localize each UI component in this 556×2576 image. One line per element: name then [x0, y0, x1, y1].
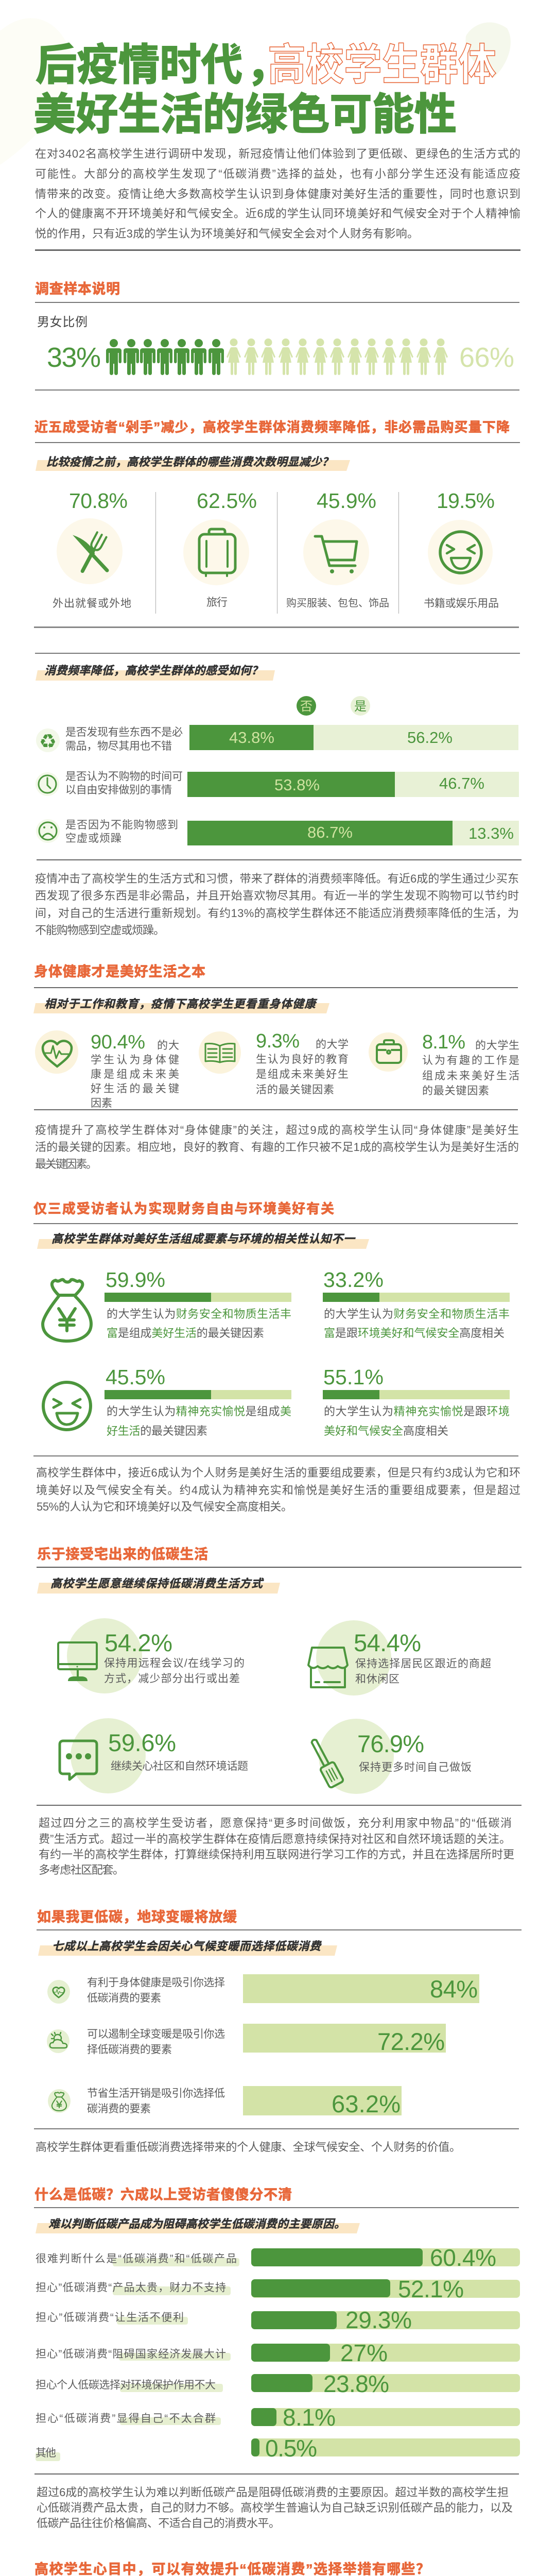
barrier row: economy: 担心”低碳消费“阻碍国家经济发展大计: [36, 2348, 226, 2360]
category: dining: 外出就餐或外地: [53, 598, 131, 609]
title: [33, 41, 496, 139]
paragraph: low-carbon life: 有约一半的高校学生群体，打算继续保持利用互联网进行学习工作的方式，并且在选择居所时更: [39, 1848, 514, 1861]
paragraph: low-carbon life: 超过四分之三的高校学生受访者，愿意保持“更多时间做饭，充分利用家中物品”的“低碳消: [39, 1817, 512, 1829]
stat: health: 的大: [157, 1040, 179, 1052]
title: ，: [246, 41, 289, 89]
factor: health 84%: 低碳消费的要素: [87, 1992, 161, 2004]
feeling row: time: 是否认为不购物的时间可: [65, 771, 183, 783]
factor: health 84%: [47, 1974, 479, 2004]
barrier row: inconvenient: 29.3%: [345, 2307, 412, 2333]
feeling row: necessities: [36, 725, 518, 753]
feeling row: emptiness: 是否因为不能购物感到: [65, 819, 178, 831]
paragraph: barriers: 超过6成的高校学生认为难以判断低碳产品是阻碍低碳消费的主要原因。超过半数的高校学生担: [37, 2486, 509, 2499]
factor: warming 72.2%: 择低碳消费的要素: [87, 2044, 172, 2056]
heading: climate: 如果我更低碳，地球变暖将放缓: [37, 1909, 237, 1925]
feeling row: emptiness: [36, 819, 519, 845]
title: 高校学生群体: [268, 41, 496, 89]
heading: low-carbon life: 乐于接受宅出来的低碳生活: [37, 1546, 208, 1562]
male icons: [106, 339, 224, 375]
stat: finance is key: 的大学生认为财务安全和物质生活丰: [107, 1308, 291, 1320]
female percent: 66%: [459, 342, 514, 373]
spending categories panel: [53, 489, 499, 614]
stat: community topics: [60, 1718, 248, 1793]
paragraph: consumption: 疫情冲击了高校学生的生活方式和习惯，带来了群体的消费频率降低。有近6成的学生通过少买东: [35, 872, 519, 885]
category: travel: [183, 489, 257, 608]
stat: health: 因素: [91, 1097, 112, 1109]
male percent: 33%: [47, 342, 101, 373]
paragraph: health: 疫情提升了高校学生群体对“身体健康”的关注，超过9成的高校学生认同“身体健康”是美好生: [35, 1124, 519, 1137]
stat: local shops: 54.4%: [354, 1629, 421, 1656]
stat: health: [35, 1030, 179, 1109]
legend: 否: [300, 700, 312, 714]
paragraph: consumption: [35, 872, 519, 937]
stat: work: 的大学生: [475, 1040, 519, 1052]
barrier row: other: 0.5%: [265, 2435, 317, 2462]
factor: savings 63.2%: [48, 2086, 402, 2117]
paragraph: health: 活的最关键的因素。相应地，良好的教育、有趣的工作只被不足1成的高校学生认为是美好生活的: [35, 1141, 519, 1154]
paragraph: consumption: 不能购物感到空虚或烦躁。: [35, 924, 165, 937]
factor: savings 63.2%: 63.2%: [332, 2090, 401, 2117]
stat: health: 康是组成未来美: [91, 1069, 179, 1080]
category: shopping: 购买服装、包包、饰品: [286, 597, 389, 609]
stat: finance and environment: 富是跟环境美好和气候安全高度相关: [324, 1327, 505, 1340]
stat: local shops: 和休闲区: [355, 1673, 399, 1685]
intro paragraph: 在对3402名高校学生进行调研中发现，新冠疫情让他们体验到了更低碳、更绿色的生活方式的: [35, 147, 520, 160]
stat: health: 90.4%: [91, 1031, 145, 1053]
title: 后疫情时代: [36, 41, 242, 89]
intro paragraph: 悦的作用，只有近3成的学生认为环境美好和气候安全会对个人财务有影响。: [35, 227, 419, 240]
stat: community topics: 继续关心社区和自然环境话题: [111, 1760, 248, 1772]
subheading: finance: 高校学生群体对美好生活组成要素与环境的相关性认知不一: [51, 1232, 356, 1245]
subheading: low-carbon life: 高校学生愿意继续保持低碳消费生活方式: [50, 1577, 264, 1590]
stat: work: 组成未来美好生活: [422, 1070, 519, 1082]
barrier row: expensive: [36, 2276, 520, 2302]
paragraph: health: 最关键因素。: [35, 1158, 97, 1171]
barrier row: other: [36, 2435, 520, 2462]
intro paragraph: 个人的健康离不开环境美好和气候安全。近6成的学生认同环境美好和气候安全对于个人精神愉: [35, 207, 520, 220]
barrier row: little effect: [36, 2370, 520, 2397]
barrier row: hard to judge: 很难判断什么是“低碳消费”和“低碳产品: [36, 2253, 237, 2265]
barrier row: other: 其他: [36, 2447, 56, 2459]
barrier row: expensive: 52.1%: [398, 2276, 464, 2302]
barrier row: inconvenient: 担心”低碳消费“让生活不便利: [36, 2312, 184, 2324]
stat: finance is key: 富是组成美好生活的最关键因素: [107, 1327, 264, 1340]
stat: finance and environment: 的大学生认为财务安全和物质生活丰: [324, 1308, 510, 1320]
stat: health: 学生认为身体健: [91, 1054, 179, 1066]
feeling row: necessities: 是否发现有些东西不是必: [65, 726, 183, 738]
stat: work: [369, 1031, 519, 1097]
barrier row: economy: [36, 2340, 520, 2366]
category: books and entertainment: 书籍或娱乐用品: [424, 598, 499, 609]
legend: [297, 696, 370, 716]
gender ratio: [37, 315, 514, 375]
stat: spirit is key: 的大学生认为精神充实愉悦是组成美: [107, 1405, 291, 1418]
paragraph: finance: 55%的人认为它和环境美好以及气候安全高度相关。: [37, 1500, 292, 1513]
intro paragraph: 可能性。大部分的高校学生发现了“低碳消费”选择的益处，也有小部分学生还没有能适应疫: [35, 167, 520, 180]
stat: cooking: [306, 1719, 472, 1794]
icon: money bag: [43, 1280, 91, 1341]
heading: finance: 仅三成受访者认为实现财务自由与环境美好有关: [33, 1201, 334, 1216]
stat: finance and environment: 33.2%: [323, 1268, 384, 1292]
female icons: [227, 338, 448, 375]
stat: finance and environment: [323, 1268, 510, 1340]
stat: education: 9.3%: [256, 1030, 300, 1052]
stat: online meeting: 54.2%: [105, 1629, 172, 1656]
paragraph: health: [35, 1124, 519, 1171]
stat: finance is key: 59.9%: [106, 1268, 165, 1292]
subheading: low-carbon life: [37, 1577, 280, 1594]
icon: laughing face: [43, 1382, 91, 1430]
stat: cooking: 76.9%: [357, 1730, 424, 1757]
feeling row: time: 以自由安排做别的事情: [65, 784, 172, 796]
barrier chart: [36, 2244, 520, 2462]
stat: work: 认为有趣的工作是: [422, 1055, 519, 1066]
paragraph: finance: 境美好以及气候安全有关。约4成认为精神充实和愉悦是美好生活的重要组成要素，但是超过: [36, 1484, 520, 1497]
factor: warming 72.2%: [47, 2024, 446, 2056]
paragraph: consumption: 西发现了很多东西是非必需品，并且开始喜欢物尽其用。有近一半的学生发现不购物可以节约时: [35, 889, 519, 902]
feeling row: time: 46.7%: [439, 774, 484, 792]
paragraph: barriers: 低碳产品往往价格偏高、不适合自己的消费水平。: [37, 2517, 280, 2530]
paragraph: finance: 高校学生群体中，接近6成认为个人财务是美好生活的重要组成要素，但是只有约3成认为它和环: [36, 1466, 520, 1479]
stat: education: 的大学: [316, 1039, 349, 1050]
subheading: health: 相对于工作和教育，疫情下高校学生更看重身体健康: [44, 997, 318, 1010]
stat: spirit and environment: 的大学生认为精神充实愉悦是跟环境: [324, 1405, 510, 1418]
feeling row: necessities: 需品，物尽其用也不错: [65, 740, 172, 752]
stat: spirit is key: 好生活的最关键因素: [107, 1425, 207, 1437]
feeling row: emptiness: 空虚或烦躁: [65, 833, 121, 844]
category: travel: 旅行: [206, 597, 228, 608]
heading: health: 身体健康才是美好生活之本: [34, 964, 205, 979]
factor: warming 72.2%: 72.2%: [377, 2028, 445, 2055]
feeling row: emptiness: 86.7%: [307, 823, 353, 841]
factor: savings 63.2%: 节省生活开销是吸引你选择低: [87, 2088, 225, 2099]
feeling row: necessities: 43.8%: [229, 728, 274, 747]
factor: warming 72.2%: 可以遏制全球变暖是吸引你选: [87, 2028, 225, 2040]
stat: health: 好生活的最关键: [91, 1083, 179, 1095]
stat: spirit is key: 45.5%: [106, 1365, 165, 1389]
stat: spirit and environment: 美好和气候安全高度相关: [324, 1425, 448, 1437]
stat: education: [199, 1030, 349, 1096]
paragraph: consumption: 间，对自己的生活进行重新规划。有约13%的高校学生群体还不能适应消费频率降低的生活，为: [35, 907, 519, 920]
paragraph: low-carbon life: [39, 1817, 514, 1876]
barrier row: expensive: 担心”低碳消费“产品太贵，财力不支持: [36, 2282, 226, 2294]
stat: cooking: 保持更多时间自己做饭: [359, 1761, 472, 1773]
barrier row: little effect: 23.8%: [323, 2370, 389, 2397]
paragraph: climate: 高校学生群体更看重低碳消费选择带来的个人健康、全球气候安全、个人财务的价值。: [36, 2141, 461, 2154]
stat: online meeting: 保持用远程会议/在线学习的: [104, 1657, 245, 1669]
intro paragraph: 情带来的改变。疫情让绝大多数高校学生认识到身体健康对美好生活的重要性，同时也意识到: [35, 188, 520, 200]
category: books and entertainment: [424, 489, 499, 609]
paragraph: low-carbon life: 多考虑社区配套。: [39, 1863, 124, 1876]
subheading: barriers: 难以判断低碳产品成为阻碍高校学生低碳消费的主要原因。: [48, 2217, 345, 2230]
intro paragraph: [35, 147, 520, 240]
stat: local shops: 保持选择居民区跟近的商超: [355, 1658, 491, 1670]
barrier row: hard to judge: [36, 2244, 520, 2271]
category: dining: 70.8%: [69, 489, 128, 513]
stat: spirit and environment: [323, 1365, 510, 1437]
feeling row: time: 53.8%: [274, 776, 320, 794]
feeling row: necessities: ♻: [39, 730, 57, 753]
category: dining: [53, 489, 131, 609]
subheading: spending frequency: 比较疫情之前，高校学生群体的哪些消费次数明显减少？: [46, 455, 333, 468]
stat: education: 活的最关键因素: [256, 1084, 334, 1096]
stat: online meeting: 方式，减少部分出行或出差: [104, 1673, 240, 1685]
factor: health 84%: 有利于身体健康是吸引你选择: [87, 1977, 225, 1989]
feeling row: time: [36, 771, 519, 797]
paragraph: low-carbon life: 费”生活方式。超过一半的高校学生群体在疫情后愿意持续保持对社区和自然环境话题的关注。: [39, 1833, 511, 1845]
barrier row: not fitting in: [36, 2404, 520, 2431]
stat: work: 8.1%: [422, 1031, 465, 1053]
stat: local shops: [308, 1620, 491, 1696]
heading: survey sample: 调查样本说明: [35, 281, 120, 297]
barrier row: inconvenient: [36, 2307, 520, 2333]
background decoration: [0, 18, 511, 165]
paragraph: finance: [36, 1466, 520, 1513]
barrier row: hard to judge: 60.4%: [430, 2244, 496, 2271]
barrier row: not fitting in: 8.1%: [283, 2404, 336, 2431]
barrier row: not fitting in: 担心“低碳消费”显得自己“不太合群: [36, 2413, 216, 2425]
title: 美好生活的绿色可能性: [33, 90, 457, 139]
stat: community topics: 59.6%: [108, 1729, 176, 1756]
paragraph: barriers: [37, 2486, 513, 2530]
stat: work: 的最关键因素: [422, 1085, 489, 1097]
barrier row: little effect: 担心个人低碳选择对环境保护作用不大: [36, 2379, 216, 2391]
legend: 是: [354, 700, 367, 714]
heading: what is low-carbon: 什么是低碳？六成以上受访者傻傻分不清: [34, 2187, 292, 2202]
paragraph: barriers: 心低碳消费产品太贵，自己的财力不够。高校学生普遍认为自己缺乏识别低碳产品的能力，以及: [37, 2501, 513, 2514]
category: shopping: 45.9%: [317, 489, 376, 513]
feeling row: necessities: 56.2%: [407, 728, 453, 747]
stat: online meeting: [58, 1618, 245, 1693]
stat: finance is key: [105, 1268, 291, 1340]
factor: savings 63.2%: 碳消费的要素: [87, 2103, 151, 2115]
gender label: 男女比例: [37, 315, 88, 329]
subheading: feelings: 消费频率降低，高校学生群体的感受如何？: [44, 664, 263, 677]
stat: spirit is key: [105, 1365, 291, 1437]
stat: spirit and environment: 55.1%: [323, 1365, 384, 1389]
feeling row: emptiness: 13.3%: [468, 824, 514, 842]
stat: education: 生认为良好的教育: [256, 1054, 349, 1065]
category: travel: 62.5%: [197, 489, 257, 513]
category: shopping: [286, 489, 389, 609]
factor: health 84%: 84%: [430, 1975, 478, 2003]
category: books and entertainment: 19.5%: [437, 489, 495, 513]
barrier row: economy: 27%: [340, 2340, 388, 2366]
heading: spending: 近五成受访者“剁手”减少，高校学生群体消费频率降低，非必需品购买量下降: [34, 419, 510, 435]
stat: education: 是组成未来美好生: [256, 1069, 349, 1080]
subheading: climate: 七成以上高校学生会因关心气候变暖而选择低碳消费: [52, 1940, 322, 1953]
